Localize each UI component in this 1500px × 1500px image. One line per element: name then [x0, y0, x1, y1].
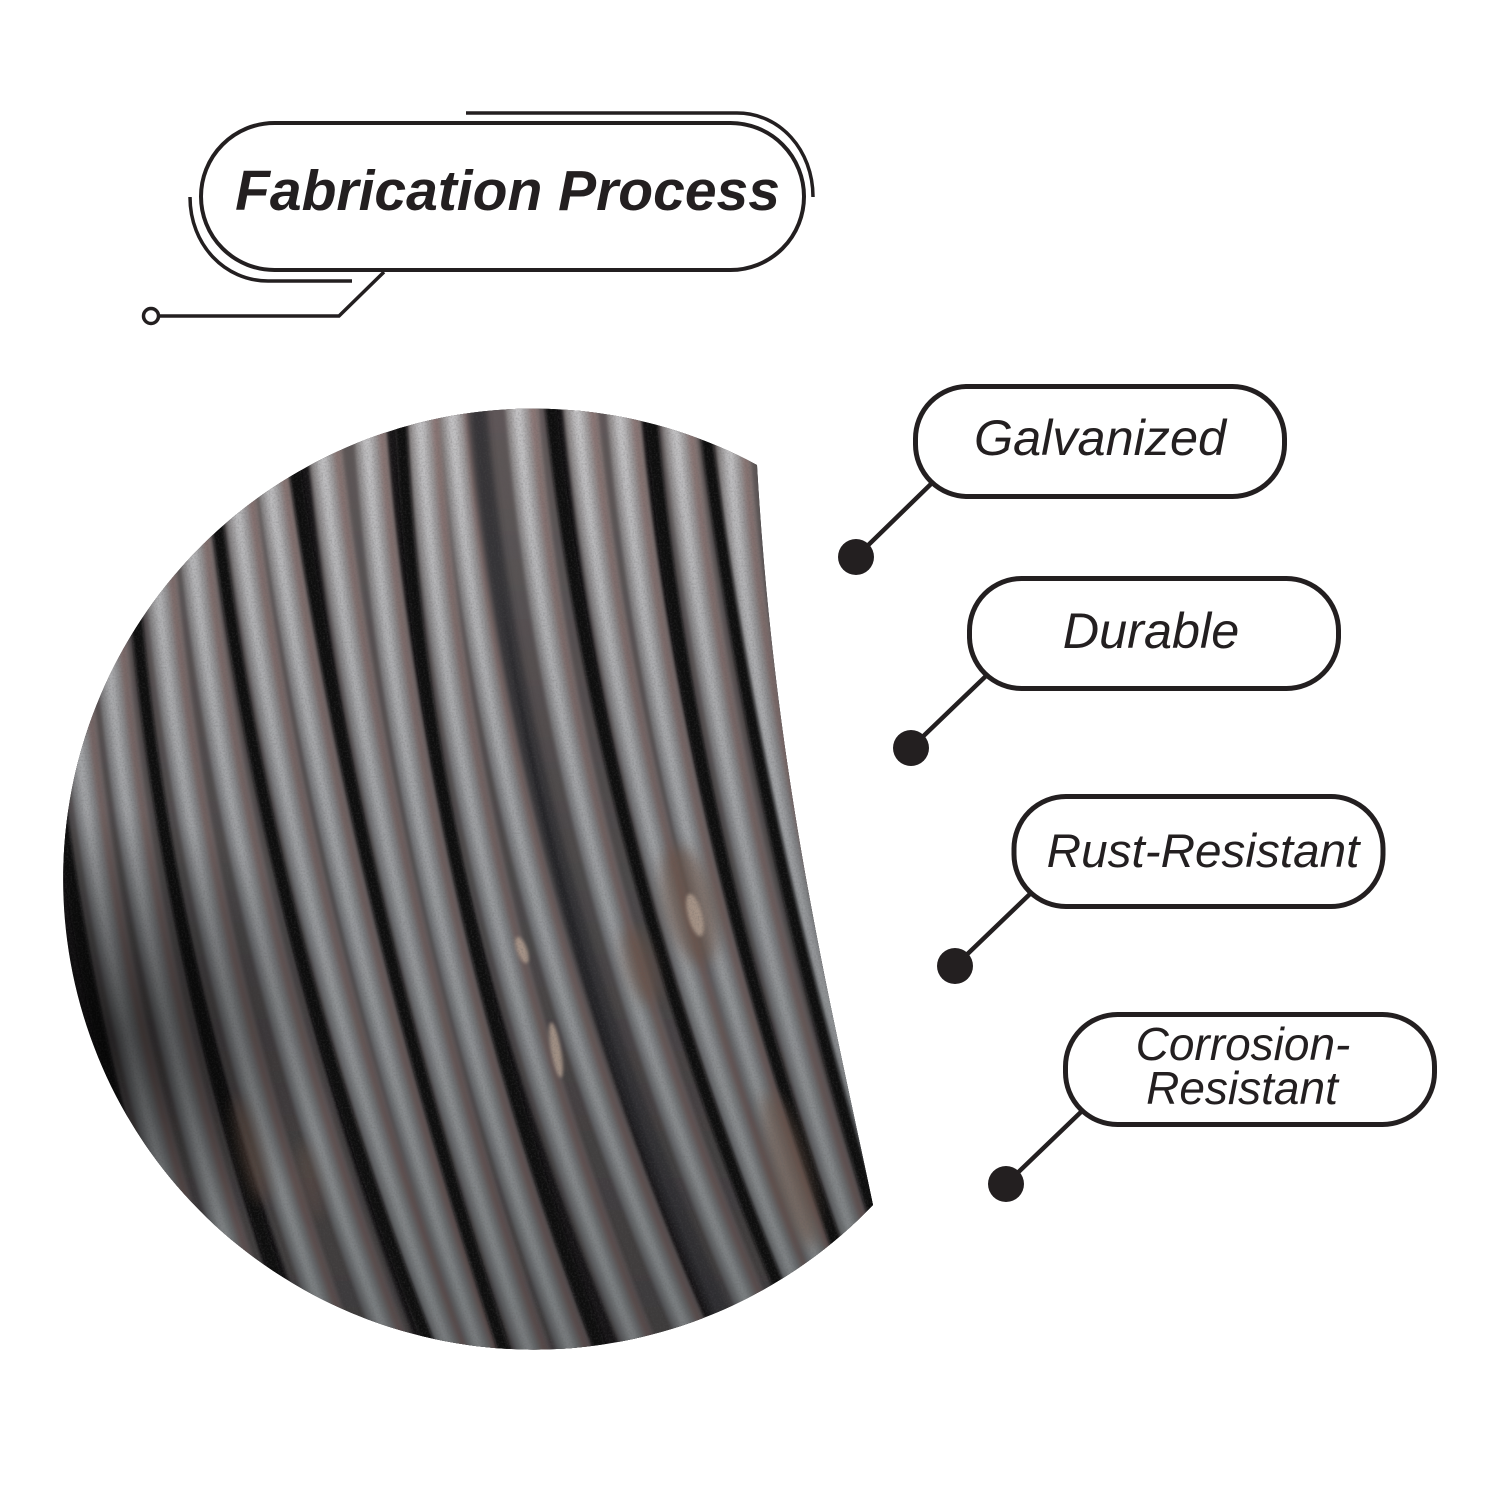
title decorative arc: upper right: [466, 113, 813, 197]
title pill: [144, 113, 813, 324]
callout: Rust-Resistant: [937, 796, 1383, 984]
callout: Corrosion-Resistant: Resistant: [1146, 1062, 1340, 1114]
callout: Durable: [893, 578, 1338, 766]
callout: Corrosion-Resistant: [988, 1014, 1434, 1202]
title decorative arc: lower left: [190, 197, 352, 281]
photo: steel wire coil in circular crop: [63, 408, 873, 1350]
callout: Corrosion-Resistant: Corrosion-: [1136, 1018, 1350, 1070]
callout: Galvanized: Galvanized: [974, 409, 1228, 466]
title text: Fabrication Process: [235, 159, 780, 223]
callout: Galvanized: [838, 386, 1284, 575]
title connector with ring: [144, 272, 384, 324]
callout: Rust-Resistant: Rust-Resistant: [1047, 825, 1361, 878]
callout: Durable: Durable: [1063, 602, 1239, 659]
